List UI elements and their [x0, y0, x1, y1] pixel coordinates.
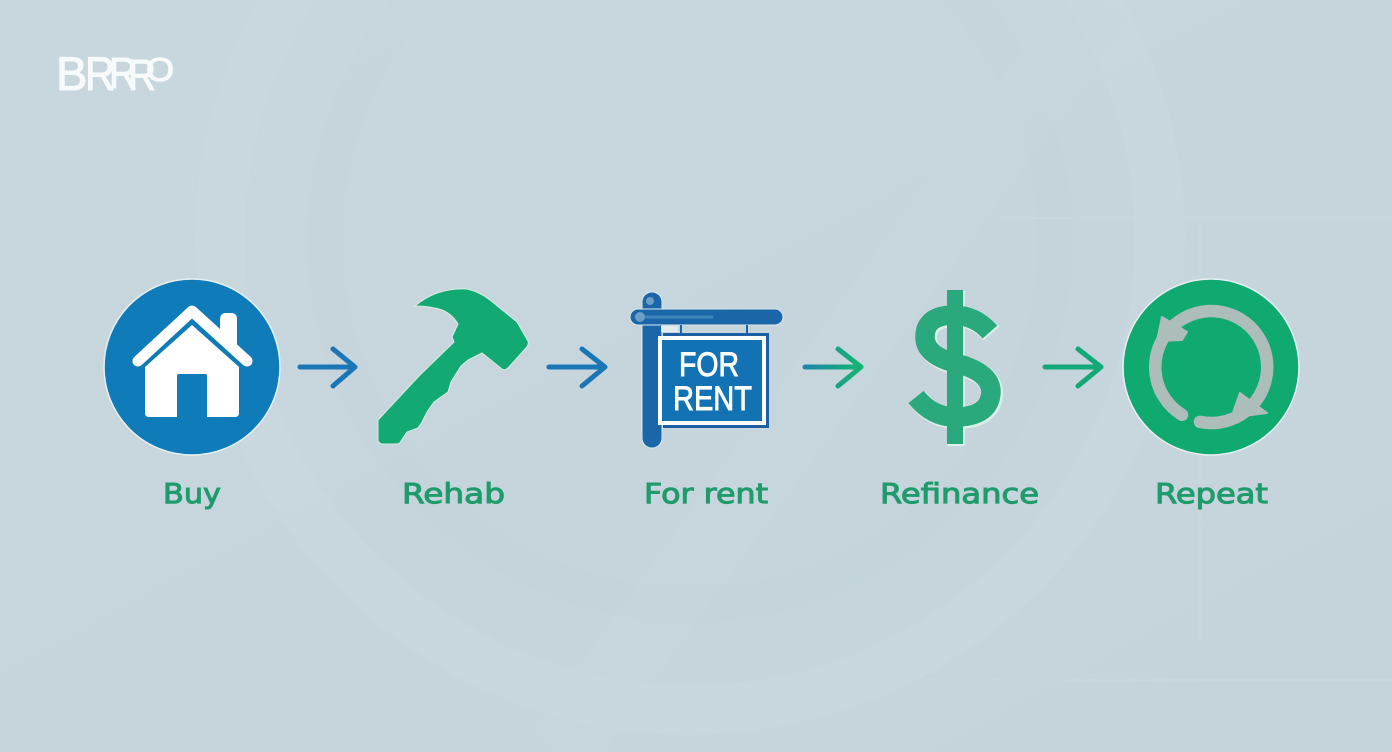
arrow: for rent to refinance: [805, 349, 861, 386]
logo: BRRRO wordmark: R: [85, 47, 115, 100]
sign text: RENT: [673, 380, 752, 418]
logo: BRRRO wordmark: R: [109, 49, 137, 98]
icon: house in blue circle: [104, 279, 280, 455]
logo: BRRRO wordmark: R: [128, 51, 156, 100]
sign text: FOR: [679, 346, 739, 384]
step: Buy: [104, 279, 280, 510]
icon: repeat circle: [1123, 279, 1299, 455]
arrow: buy to rehab: [300, 349, 355, 386]
logo: BRRRO wordmark: O: [146, 51, 174, 88]
icon: for rent sign: [630, 292, 783, 448]
arrow: refinance to repeat: [1045, 349, 1101, 386]
sign text: [673, 346, 752, 418]
label: Buy: Buy: [163, 477, 221, 510]
step: For rent: [630, 292, 783, 510]
step: Repeat: [1123, 279, 1299, 510]
label: Repeat: Repeat: [1155, 477, 1268, 510]
icon: dollar sign: [916, 290, 992, 446]
step: Refinance: [880, 290, 1039, 510]
label: Rehab: Rehab: [402, 477, 505, 510]
logo: BRRRO wordmark: B: [56, 47, 87, 100]
icon: hammer: [378, 289, 528, 444]
step: Rehab: [378, 289, 528, 510]
label: For rent: For rent: [644, 477, 768, 510]
arrow: rehab to for rent: [549, 349, 605, 386]
label: Refinance: Refinance: [880, 477, 1039, 510]
logo: BRRRO wordmark: [56, 47, 174, 100]
